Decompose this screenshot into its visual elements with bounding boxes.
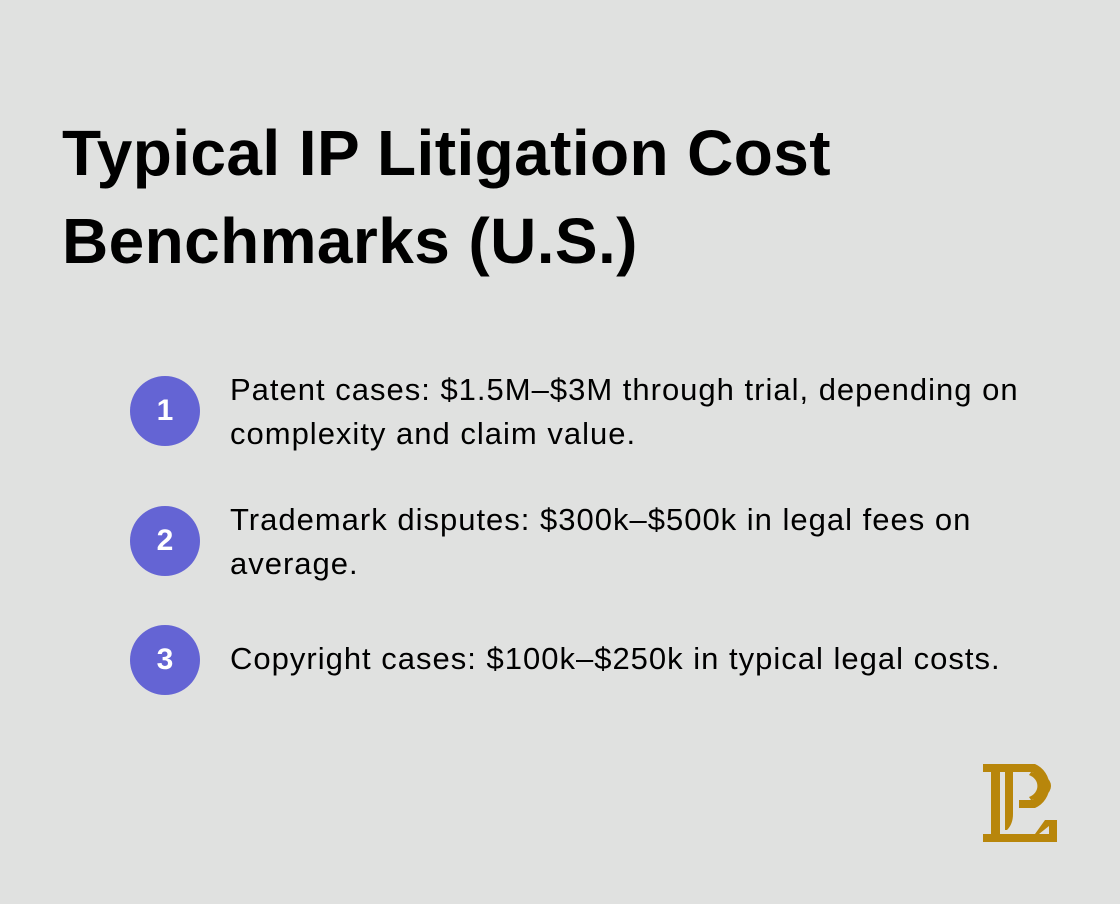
badge 2 (130, 506, 200, 576)
badge 1 (130, 376, 200, 446)
item 2 (130, 502, 971, 581)
badge 3: 3 (157, 643, 173, 676)
item 3 (130, 625, 1001, 695)
logo (983, 764, 1057, 842)
title (62, 117, 831, 277)
text 2: Trademark disputes: $300k–$500k in legal fees on average. (230, 502, 971, 581)
title: Typical IP Litigation Cost (62, 117, 831, 189)
text 3: Copyright cases: $100k–$250k in typical legal costs. (230, 641, 1001, 676)
item 1 (130, 372, 1019, 451)
badge 3 (130, 625, 200, 695)
text 1: Patent cases: $1.5M–$3M through trial, depending on complexity and claim value. (230, 372, 1019, 451)
badge 2: 2 (157, 524, 173, 557)
title: Benchmarks (U.S.) (62, 205, 638, 277)
badge 1: 1 (157, 394, 173, 427)
